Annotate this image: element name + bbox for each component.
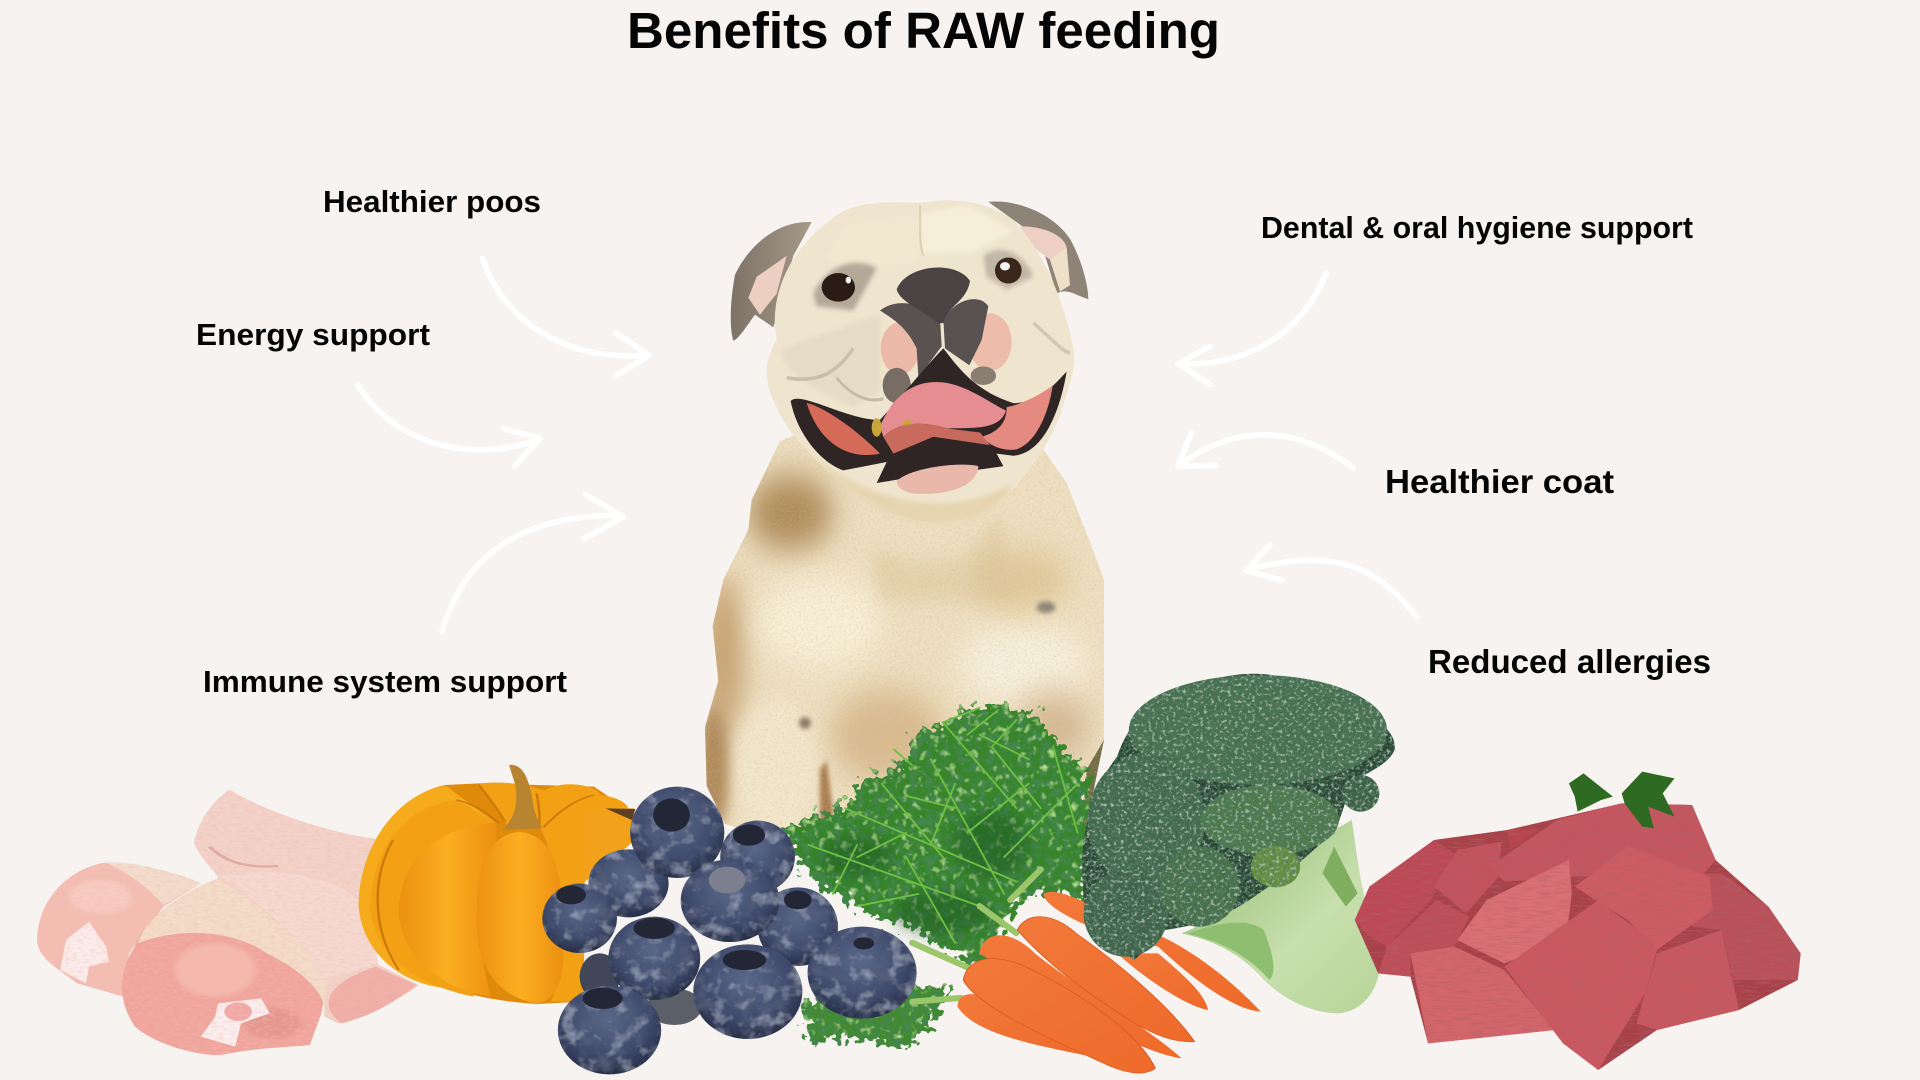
carrot lower [957, 994, 1099, 1058]
carrot front [963, 959, 1155, 1073]
label: Healthier coat: Healthier coat [1385, 463, 1614, 500]
blueberry calyx marks [556, 798, 874, 1009]
carrot main [1017, 917, 1195, 1042]
carrot second [979, 935, 1182, 1058]
label: Immune system support: Immune system support [203, 664, 567, 699]
title: Benefits of RAW feeding [627, 2, 1220, 59]
broccoli [1082, 674, 1395, 1013]
carrot tops [784, 705, 1092, 1047]
broccoli stem [1182, 820, 1381, 1013]
arrows [358, 258, 1417, 632]
arrow: Immune system support [442, 495, 623, 632]
arrow: Healthier coat [1178, 432, 1353, 468]
raw chicken drumsticks [37, 789, 419, 1055]
carrot stems [912, 869, 1041, 1002]
raw beef chunks [1355, 772, 1801, 1070]
dog right ear [988, 202, 1088, 299]
carrot behind broccoli [1044, 892, 1261, 1012]
dog nose [897, 268, 970, 323]
parsley garnish [1569, 772, 1674, 828]
pumpkin stem [502, 765, 542, 830]
pumpkin [359, 765, 635, 1004]
label: Energy support: Energy support [196, 317, 430, 352]
arrow: Healthier poos [482, 258, 649, 376]
chicken front drumstick [122, 878, 327, 1055]
carrots [957, 892, 1261, 1073]
dog chin [897, 465, 978, 494]
chicken left drumstick [37, 862, 201, 997]
beef base and back chunks [1355, 803, 1801, 1070]
chicken back drumstick [194, 789, 419, 1023]
pumpkin wedge [584, 808, 634, 883]
arrow: Reduced allergies [1247, 545, 1417, 617]
dog muzzle patches [880, 299, 1012, 403]
dog left ear [731, 222, 812, 341]
carrot frond strokes [808, 708, 1078, 943]
pumpkin creases [378, 785, 594, 970]
dog eyes [822, 257, 1022, 302]
broccoli florets [1082, 674, 1395, 960]
blueberry group [542, 787, 917, 1074]
arrow: Energy support [358, 384, 540, 467]
carrot frond shadows [820, 811, 1029, 934]
blueberries [542, 787, 917, 1074]
label: Reduced allergies: Reduced allergies [1428, 643, 1711, 680]
dog tongue [880, 382, 1006, 437]
dog body [705, 436, 1104, 838]
dog head [767, 200, 1074, 524]
dog mouth [791, 348, 1067, 483]
arrow: Dental and oral hygiene [1178, 273, 1326, 384]
label: Dental and oral hygiene support: Dental & oral hygiene support [1261, 210, 1693, 245]
carrot short [1117, 953, 1208, 1010]
label: Healthier poos: Healthier poos [323, 184, 541, 219]
dog photo illustration [697, 200, 1104, 841]
